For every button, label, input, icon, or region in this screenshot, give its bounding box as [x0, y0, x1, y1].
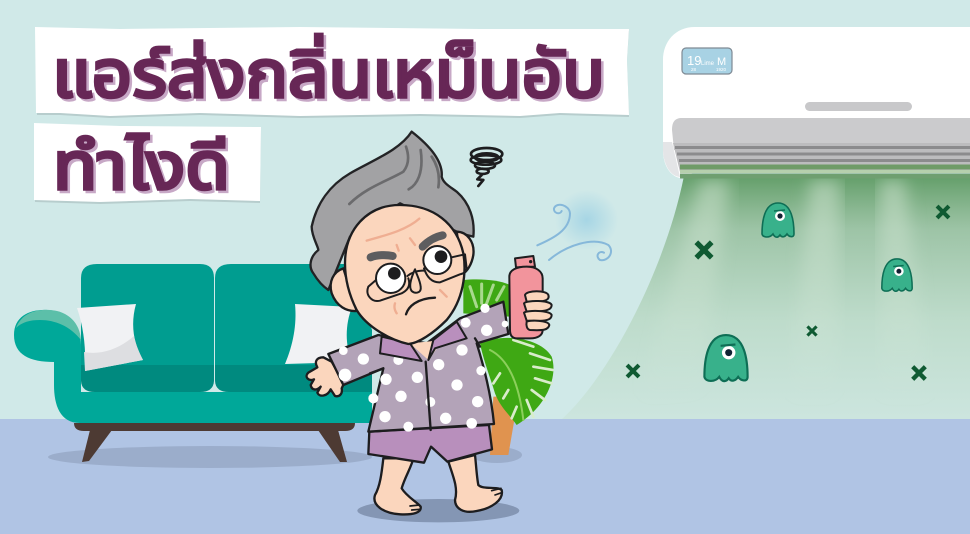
AC display: 1920: [716, 67, 727, 72]
character group drawn in zoomed coordinates: [307, 132, 618, 522]
germ cross 3: [807, 326, 817, 336]
eyes: [376, 264, 405, 293]
right ear: [457, 232, 474, 273]
left pillow: [77, 304, 143, 371]
face: [345, 205, 464, 344]
wind swirl: [537, 190, 618, 260]
nose: [410, 269, 421, 293]
floor: [0, 419, 970, 534]
background wall: [0, 0, 970, 419]
mouth: [406, 298, 435, 314]
foot shadow: [357, 499, 519, 522]
air conditioner: [663, 27, 970, 178]
title paper line 2: ทำไงดี: [53, 129, 230, 203]
title paper line 1: แอร์ส่งกลิ่นเหม็นอับ: [54, 36, 608, 114]
right hand: [524, 291, 552, 330]
monster: right: [882, 259, 912, 291]
germ cross 4: [627, 365, 639, 377]
eyebrows: [371, 235, 443, 257]
sofa back cushions: [81, 264, 214, 380]
title paper line 1: แอร์ส่งกลิ่นเหม็นอับ: [52, 34, 605, 111]
neck: [410, 340, 443, 360]
placket and folds: [370, 338, 480, 430]
AC display: M: [717, 56, 726, 68]
polka dots: [339, 304, 508, 432]
AC display: Lime: [701, 61, 715, 67]
hair: [311, 132, 474, 290]
AC handle: [805, 102, 912, 111]
germ cross 5: [913, 367, 925, 379]
collar: [380, 322, 467, 361]
spray bottle: [509, 256, 543, 338]
sofa seat and arm: [14, 310, 372, 423]
monster: large: [704, 335, 748, 381]
plant: [463, 279, 553, 463]
face details: [367, 219, 467, 314]
green smelly air stream: [562, 176, 970, 419]
sofa legs: [74, 423, 355, 462]
sofa shadow: [48, 446, 372, 468]
left ear: [331, 268, 357, 311]
AC display: [682, 48, 732, 74]
right pillow: [285, 304, 352, 364]
angry scribble: [471, 148, 502, 186]
hair strands: [349, 147, 439, 204]
left hand: [307, 357, 344, 396]
legs and feet: [374, 455, 502, 514]
shorts: [368, 425, 492, 463]
germ cross 2: [937, 206, 949, 218]
AC display: 28: [691, 67, 697, 72]
AC display: 19: [687, 53, 701, 68]
sofa: [14, 264, 372, 468]
title paper line 2: ทำไงดี: [56, 132, 232, 206]
title paper line 2: [34, 123, 261, 206]
glasses: [367, 254, 467, 301]
germ cross 1: [696, 242, 712, 258]
monster: top: [762, 203, 794, 237]
pajama top: [328, 302, 508, 432]
